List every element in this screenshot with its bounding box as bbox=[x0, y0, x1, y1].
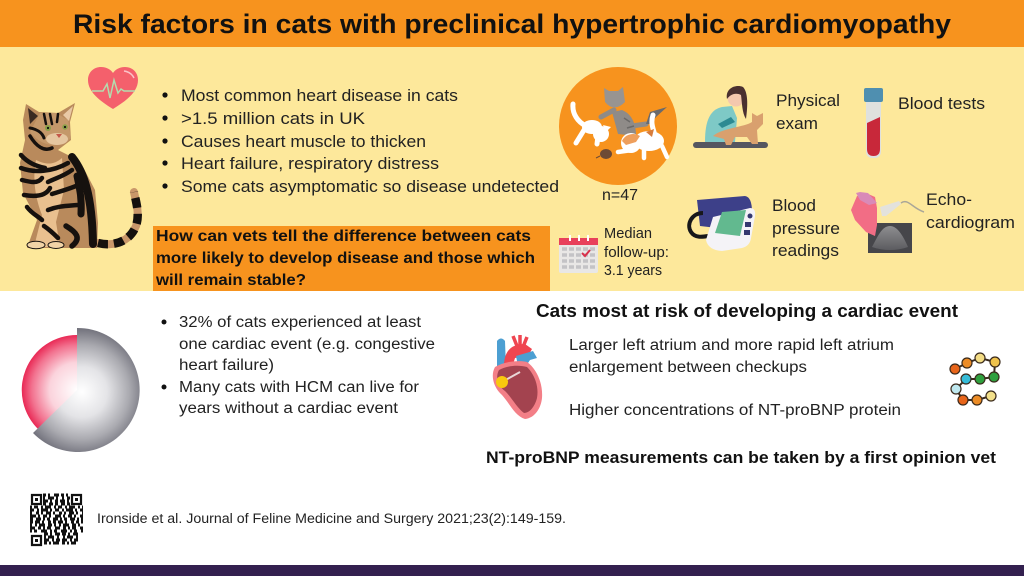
callout: key question: will remain stable? bbox=[155, 272, 306, 289]
note: first opinion vet: NT-proBNP measurements can be taken by a first opinion vet bbox=[486, 449, 997, 467]
icon: heart with pulse bbox=[88, 67, 138, 109]
text: risk factors bbox=[569, 337, 901, 419]
text: physical exam: Physical bbox=[776, 91, 840, 110]
list: disease facts: Heart failure, respiratory distress bbox=[181, 154, 439, 173]
text: blood pressure readings: pressure bbox=[772, 219, 840, 238]
white cat bbox=[573, 104, 611, 144]
list: disease facts: Causes heart muscle to thicken bbox=[181, 132, 426, 151]
text: blood tests: Blood tests bbox=[898, 94, 985, 113]
icon: blood pressure monitor bbox=[689, 196, 755, 251]
icon: echocardiogram bbox=[851, 192, 924, 253]
chart: cardiac event pie bbox=[22, 328, 140, 452]
list: outcomes bbox=[162, 314, 435, 417]
heading: cats most at risk: Cats most at risk of developing a cardiac event bbox=[536, 301, 958, 321]
icon: blood test tube bbox=[864, 88, 883, 158]
list: disease facts bbox=[162, 86, 559, 196]
list: outcomes: heart failure) bbox=[179, 357, 274, 374]
text: median follow-up bbox=[604, 226, 669, 279]
icon: circle of cats bbox=[559, 67, 677, 185]
text: echocardiogram bbox=[926, 190, 1015, 232]
calico cat bbox=[618, 115, 667, 158]
icon: heart anatomy bbox=[493, 335, 542, 419]
text: risk factors: Higher concentrations of NT-proBNP protein bbox=[569, 402, 901, 419]
text: blood pressure readings: Blood bbox=[772, 196, 816, 215]
list: outcomes: Many cats with HCM can live for bbox=[179, 379, 419, 396]
callout: key question bbox=[153, 226, 550, 291]
text: physical exam bbox=[776, 91, 840, 133]
callout: key question: more likely to develop disease and those which bbox=[156, 250, 535, 267]
callout: key question: How can vets tell the difference between cats bbox=[156, 228, 531, 245]
title banner bbox=[0, 0, 1024, 47]
text: median follow-up: follow-up: bbox=[604, 245, 669, 261]
text: risk factors: Larger left atrium and more rapid left atrium bbox=[569, 337, 894, 354]
list: outcomes: years without a cardiac event bbox=[179, 400, 399, 417]
icon: QR code bbox=[30, 495, 83, 545]
icon: vet examining cat bbox=[693, 86, 768, 148]
list: disease facts: Most common heart disease in cats bbox=[181, 86, 458, 105]
citation: Ironside et al. Journal of Feline Medicine and Surgery 2021;23(2):149-159. bbox=[97, 511, 566, 526]
panel: intro background bbox=[0, 47, 1024, 291]
text: echocardiogram: cardiogram bbox=[926, 213, 1015, 232]
icon: cat bbox=[20, 103, 138, 249]
text: physical exam: exam bbox=[776, 114, 818, 133]
title banner: Risk factors in cats with preclinical hypertrophic cardiomyopathy bbox=[73, 9, 951, 39]
list: outcomes: one cardiac event (e.g. congestive bbox=[179, 336, 435, 353]
label: sample size: n=47 bbox=[602, 187, 638, 204]
footer bar bbox=[0, 565, 1024, 576]
list: disease facts: Some cats asymptomatic so disease undetected bbox=[181, 177, 559, 196]
text: risk factors: enlargement between checkups bbox=[569, 359, 807, 376]
icon: calendar bbox=[559, 235, 598, 273]
text: blood pressure readings bbox=[772, 196, 840, 260]
text: median follow-up: 3.1 years bbox=[604, 263, 662, 279]
mouse bbox=[596, 149, 612, 159]
text: median follow-up: Median bbox=[604, 226, 652, 242]
grey cat bbox=[601, 87, 667, 136]
text: echocardiogram: Echo- bbox=[926, 190, 972, 209]
list: disease facts: >1.5 million cats in UK bbox=[181, 109, 366, 128]
icon: protein chain bbox=[950, 353, 1000, 405]
list: outcomes: 32% of cats experienced at least bbox=[179, 314, 422, 331]
text: blood pressure readings: readings bbox=[772, 241, 839, 260]
